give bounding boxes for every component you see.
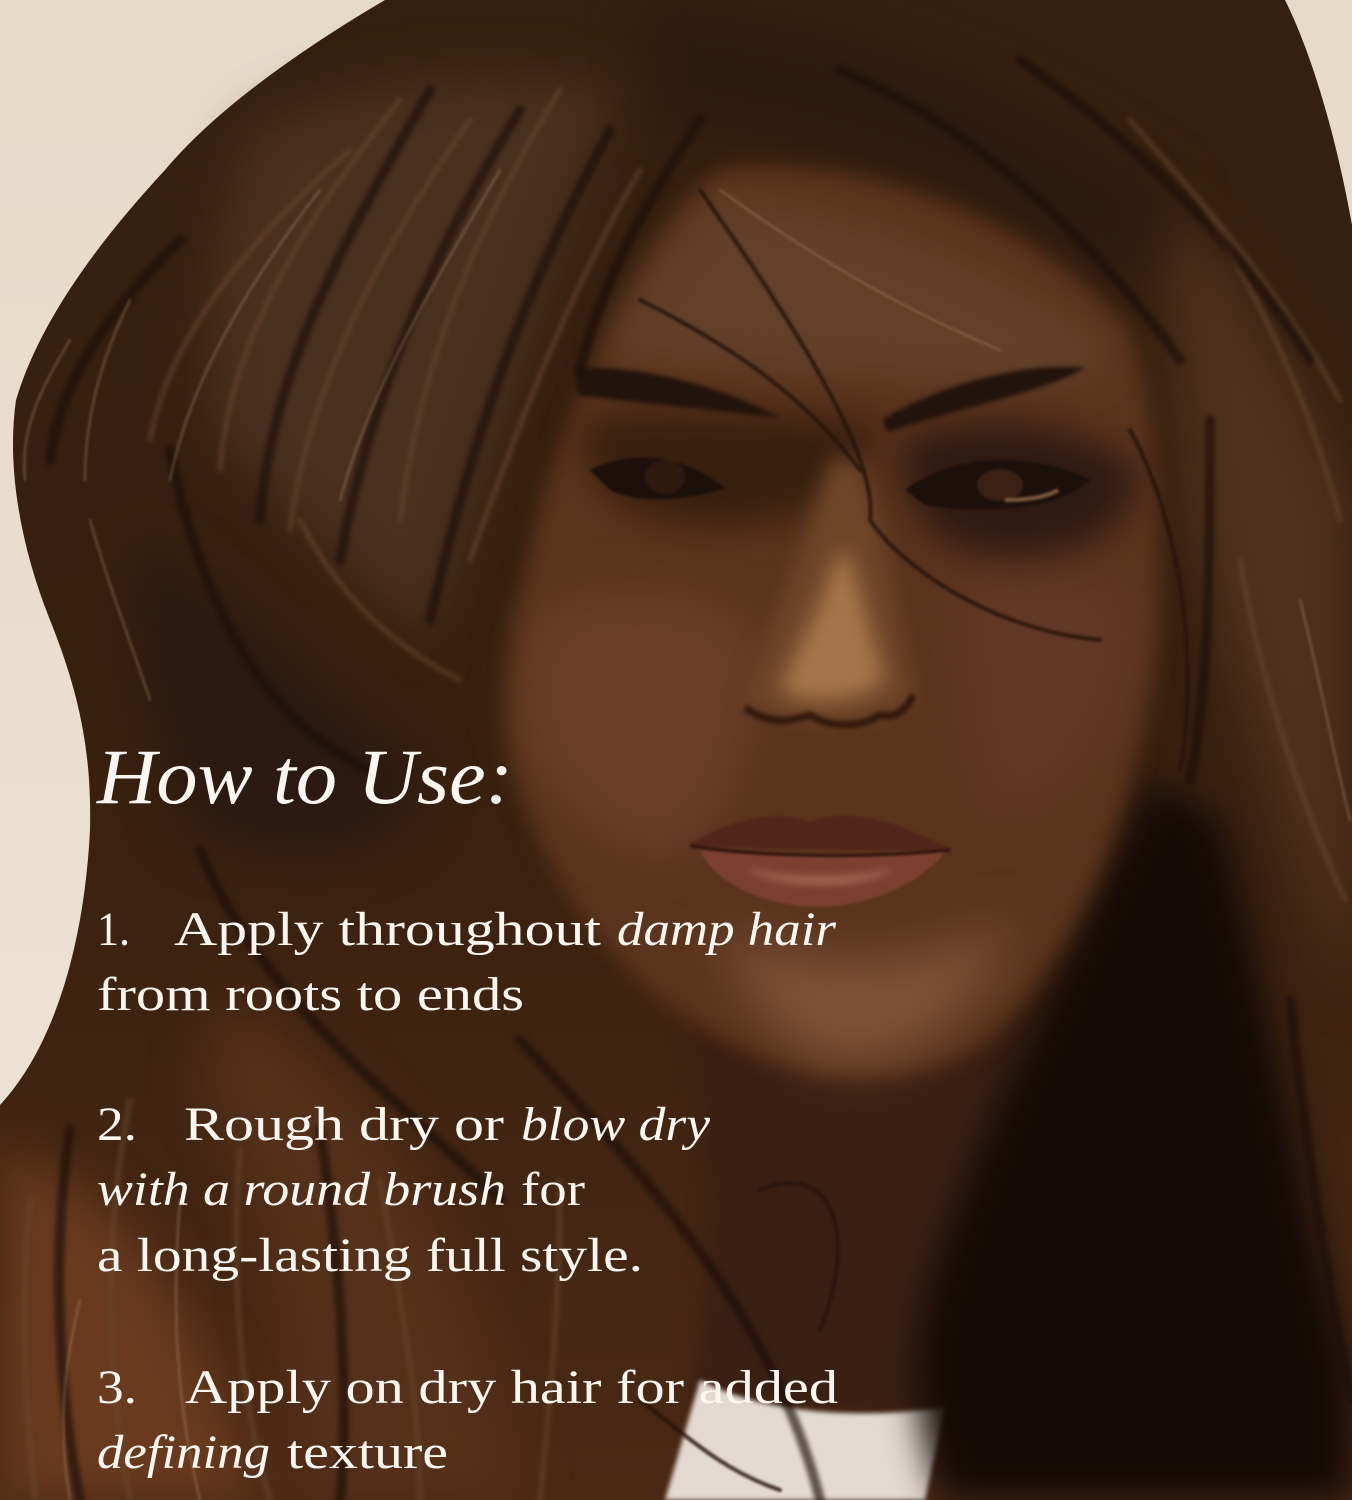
step 3 instructions: 3. <box>97 1361 137 1414</box>
step 3 instructions <box>97 1361 838 1479</box>
step 2 instructions <box>97 1098 711 1282</box>
step 2 instructions: a long-lasting full style. <box>97 1229 643 1282</box>
step 1 instructions <box>97 903 836 1021</box>
photo: neck <box>690 1000 1030 1420</box>
photo: lips <box>688 816 952 907</box>
step 2 instructions: Rough dry or <box>184 1098 504 1151</box>
photo: white shirt <box>665 1380 945 1500</box>
step 3 instructions: texture <box>287 1426 448 1479</box>
photo: dark right-side hair <box>917 780 1352 1500</box>
photo: face <box>508 167 1160 1076</box>
step 2 instructions: with a round brush <box>97 1163 506 1216</box>
title: How to Use: <box>96 733 513 820</box>
step 2 instructions: blow dry <box>521 1098 711 1151</box>
step 3 instructions: defining <box>97 1426 270 1479</box>
photo: eyes <box>590 457 1090 510</box>
step 1 instructions: Apply throughout <box>174 903 602 956</box>
step 1 instructions: from roots to ends <box>97 968 524 1021</box>
step 3 instructions: Apply on dry hair for added <box>185 1361 838 1414</box>
step 2 instructions: 2. <box>97 1098 137 1151</box>
step 1 instructions: 1. <box>97 903 130 956</box>
step 1 instructions: damp hair <box>617 903 836 956</box>
step 2 instructions: for <box>521 1163 585 1216</box>
photo: eyebrows <box>575 367 1085 432</box>
